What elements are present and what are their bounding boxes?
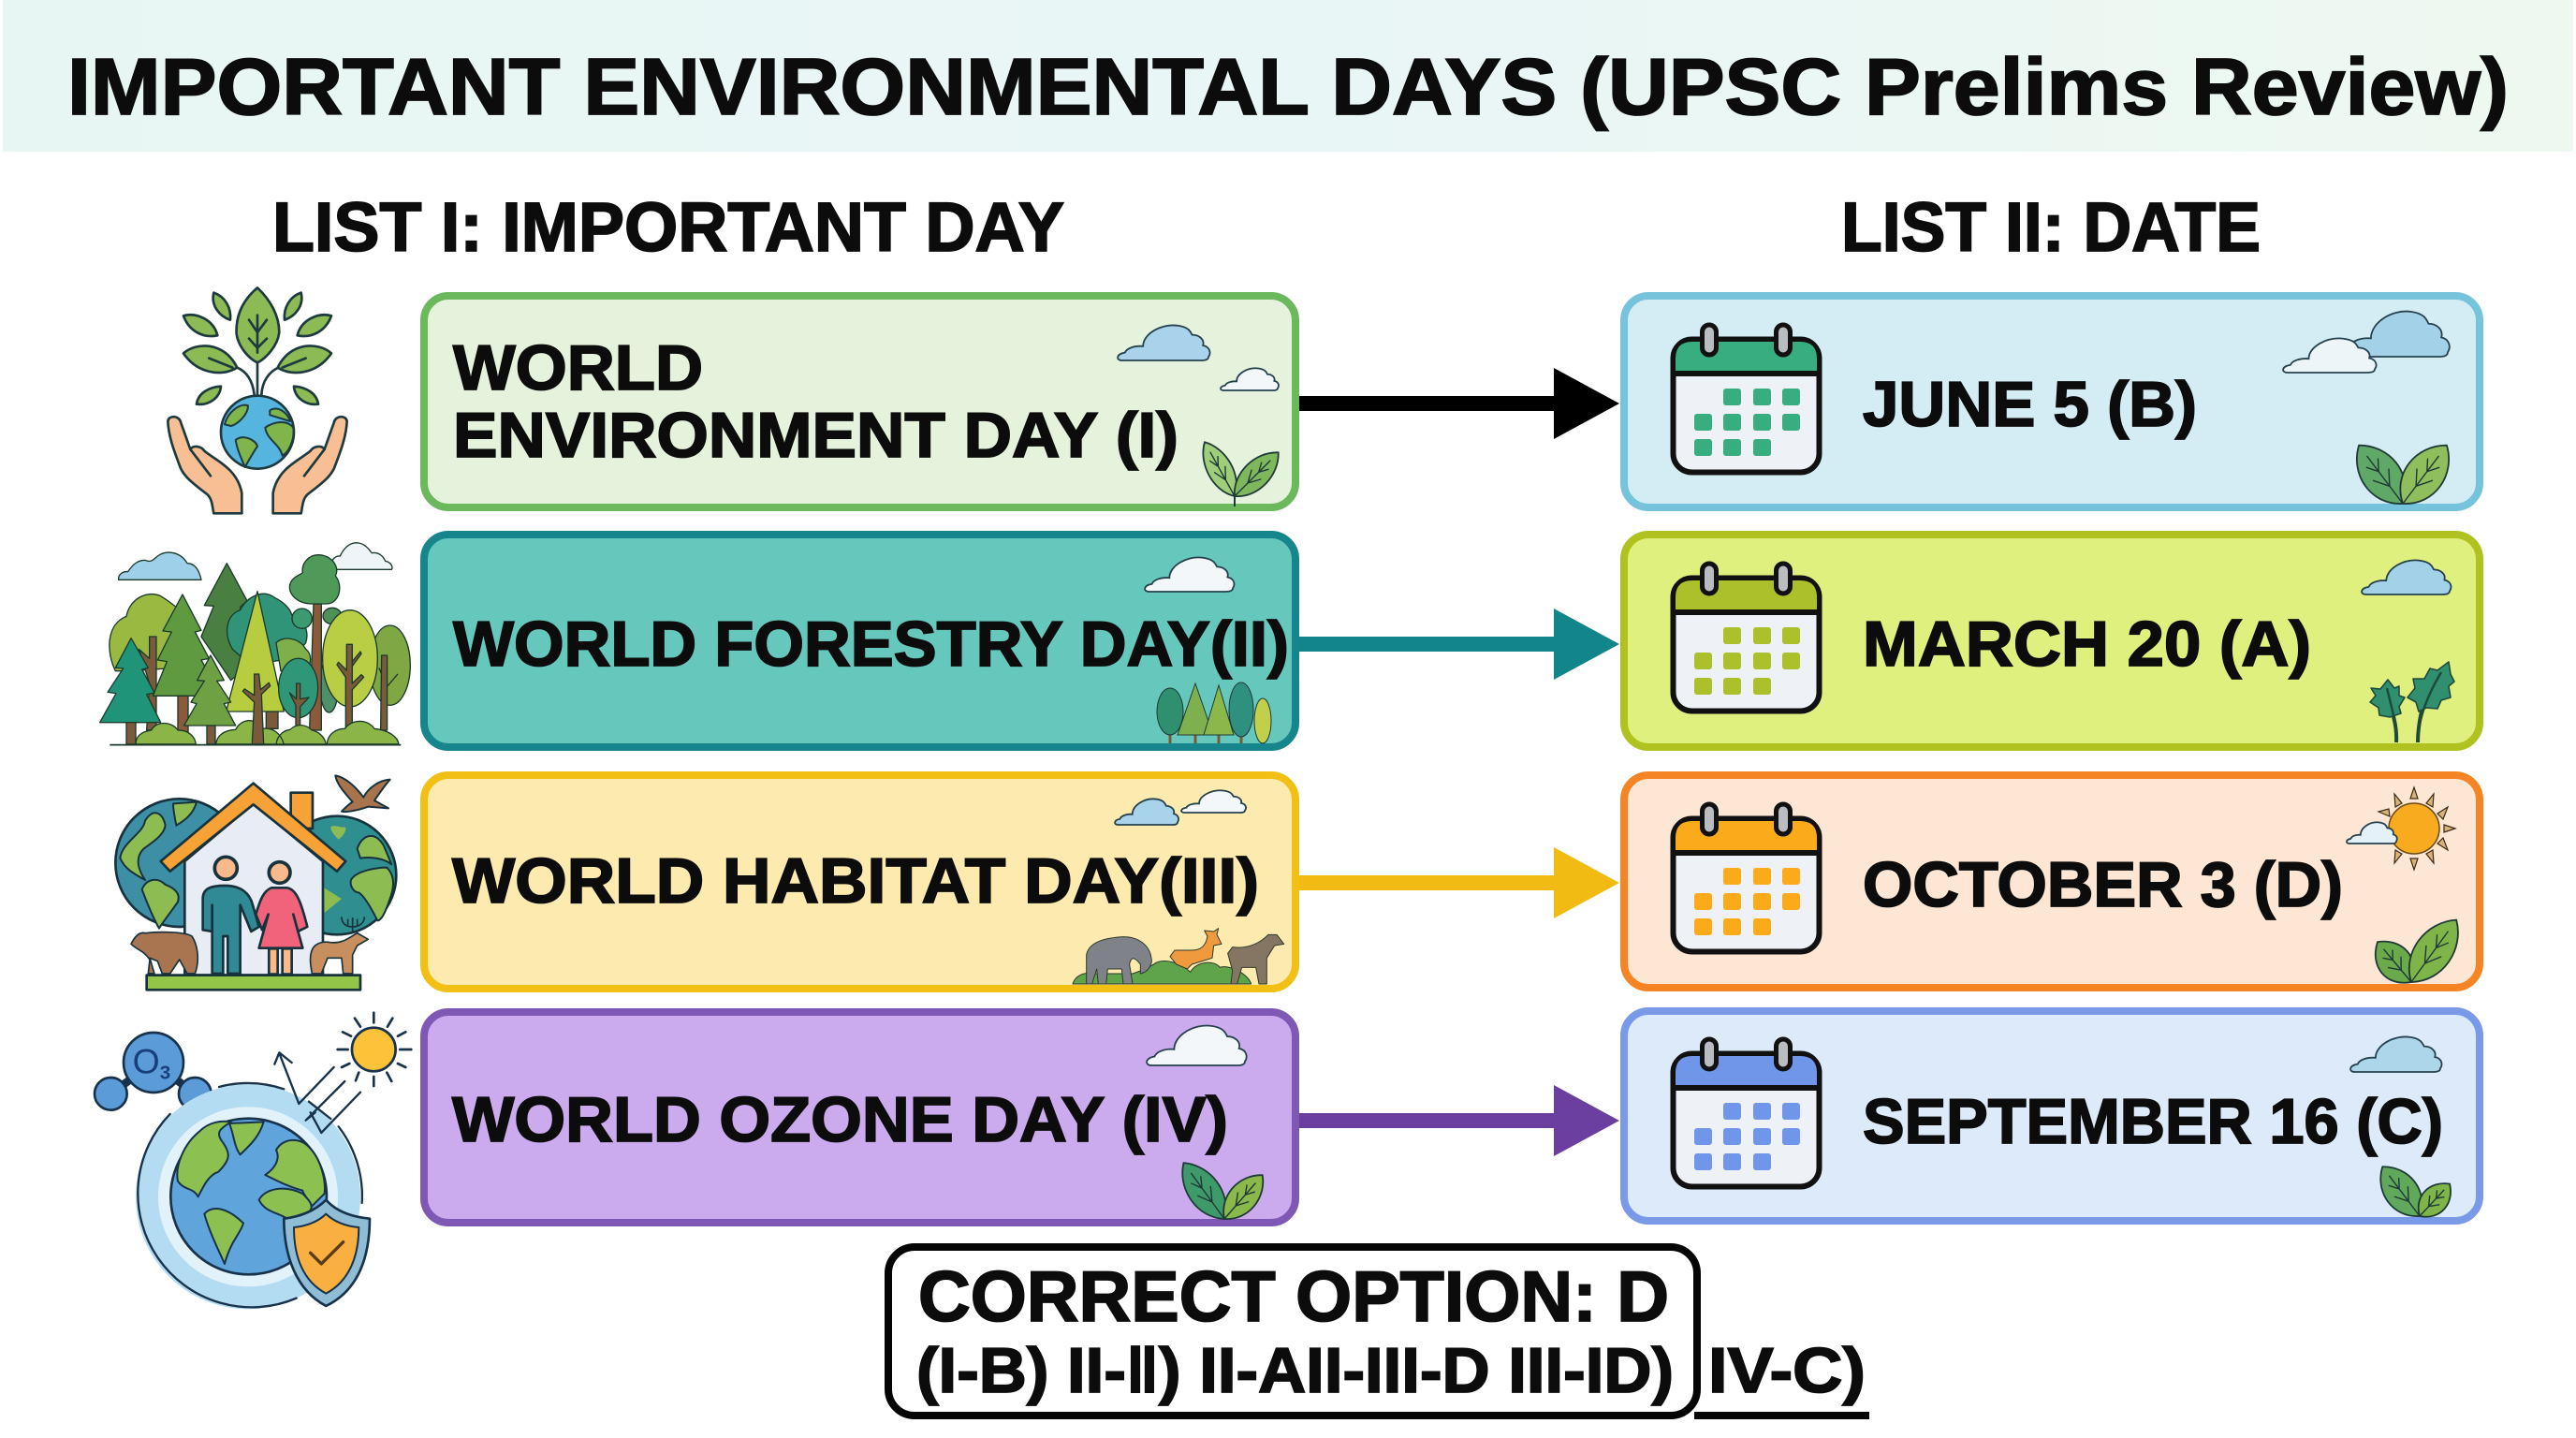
decoration: cloud and leaves bbox=[2350, 1036, 2459, 1226]
arrow: environment to june bbox=[1299, 368, 1619, 439]
panel: world environment day bbox=[424, 296, 1295, 507]
panel: march 20 bbox=[1624, 535, 2480, 747]
title: IMPORTANT ENVIRONMENTAL DAYS (UPSC Prelims Review) bbox=[67, 43, 2509, 132]
callout heading: CORRECT OPTION: D bbox=[918, 1257, 1669, 1337]
icon: forest bbox=[100, 543, 410, 745]
arrow: forestry to march bbox=[1299, 609, 1619, 680]
decoration: clouds and leaves bbox=[2283, 312, 2462, 515]
panel: october 3 bbox=[1624, 775, 2480, 993]
panel: june 5 bbox=[1624, 296, 2480, 515]
icon: hands holding globe with plant bbox=[168, 287, 347, 513]
icon: blue calendar bbox=[1674, 1039, 1820, 1187]
decoration: clouds and sprout bbox=[1118, 325, 1288, 506]
label: october 3: OCTOBER 3 (D) bbox=[1863, 849, 2343, 920]
panel: world ozone day bbox=[424, 1012, 1295, 1228]
label: world habitat day: WORLD HABITAT DAY(III) bbox=[452, 845, 1259, 917]
decoration: cloud and leaves bbox=[1147, 1026, 1273, 1228]
heading: list II: LIST II: DATE bbox=[1841, 188, 2261, 266]
label: june 5: JUNE 5 (B) bbox=[1863, 369, 2197, 440]
decoration: cloud and mini trees bbox=[1145, 557, 1271, 743]
label: world environment day: ENVIRONMENT DAY (I) bbox=[453, 400, 1178, 471]
label: world environment day: WORLD bbox=[453, 332, 703, 404]
panel: september 16 bbox=[1624, 1011, 2480, 1226]
label: world environment day bbox=[453, 332, 1178, 471]
decoration: clouds and animals bbox=[1073, 790, 1284, 984]
decoration: sun, cloud, leaves bbox=[2347, 787, 2471, 993]
label: world ozone day: WORLD OZONE DAY (IV) bbox=[452, 1084, 1228, 1155]
heading: list I: LIST I: IMPORTANT DAY bbox=[272, 188, 1064, 266]
icon: habitat house and globe bbox=[115, 775, 396, 990]
callout: correct option bbox=[888, 1247, 1869, 1419]
label: september 16: SEPTEMBER 16 (C) bbox=[1863, 1086, 2443, 1157]
arrow: ozone to september bbox=[1299, 1085, 1619, 1156]
title band bbox=[3, 0, 2573, 152]
icon: ozone layer earth bbox=[95, 1013, 411, 1309]
label: march 20: MARCH 20 (A) bbox=[1863, 609, 2311, 680]
arrow: habitat to october bbox=[1299, 847, 1619, 918]
icon: green calendar bbox=[1674, 325, 1820, 472]
icon: orange calendar bbox=[1674, 804, 1820, 951]
decoration: cloud and trees bbox=[2362, 560, 2454, 742]
panel: world habitat day bbox=[424, 775, 1295, 989]
callout answer key: IV-C) bbox=[1708, 1335, 1866, 1406]
O3 label: O bbox=[133, 1042, 160, 1081]
label: world forestry day: WORLD FORESTRY DAY(II) bbox=[453, 609, 1289, 680]
O3 label: 3 bbox=[160, 1063, 170, 1084]
callout answer key: (I-B) II-‖) II-AII-III-D III-ID) bbox=[916, 1335, 1674, 1406]
icon: lime calendar bbox=[1674, 564, 1820, 712]
panel: world forestry day bbox=[424, 535, 1295, 747]
